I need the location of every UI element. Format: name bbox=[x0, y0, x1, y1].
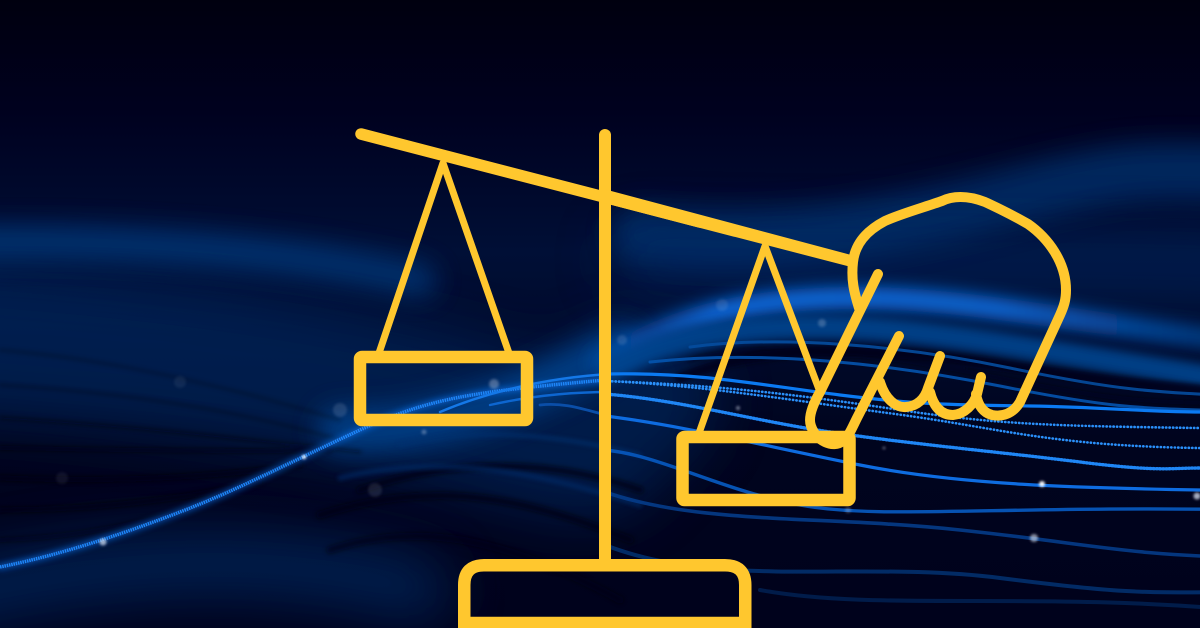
scale post bbox=[599, 135, 611, 565]
ring finger bbox=[930, 377, 981, 415]
scale base bbox=[464, 565, 745, 623]
dim blue wave lines bbox=[340, 342, 1200, 612]
icon: hand pressing down on the right pan bbox=[810, 197, 1066, 444]
left pan strings bbox=[378, 163, 510, 356]
balance scale bbox=[360, 134, 855, 623]
index finger bbox=[810, 274, 899, 444]
right pan bbox=[682, 437, 850, 500]
right pan strings bbox=[698, 246, 820, 436]
middle finger bbox=[880, 356, 940, 407]
dark streaks bbox=[0, 350, 1200, 600]
sparkle particles bbox=[56, 299, 1200, 546]
left pan bbox=[360, 357, 527, 420]
tilted beam bbox=[361, 134, 855, 268]
bright wave lines on the right bbox=[605, 374, 1200, 490]
back of hand bbox=[852, 197, 1066, 416]
bright wave line running from lower left to centre bbox=[0, 374, 610, 567]
soft blue haze bands bbox=[0, 171, 1200, 600]
